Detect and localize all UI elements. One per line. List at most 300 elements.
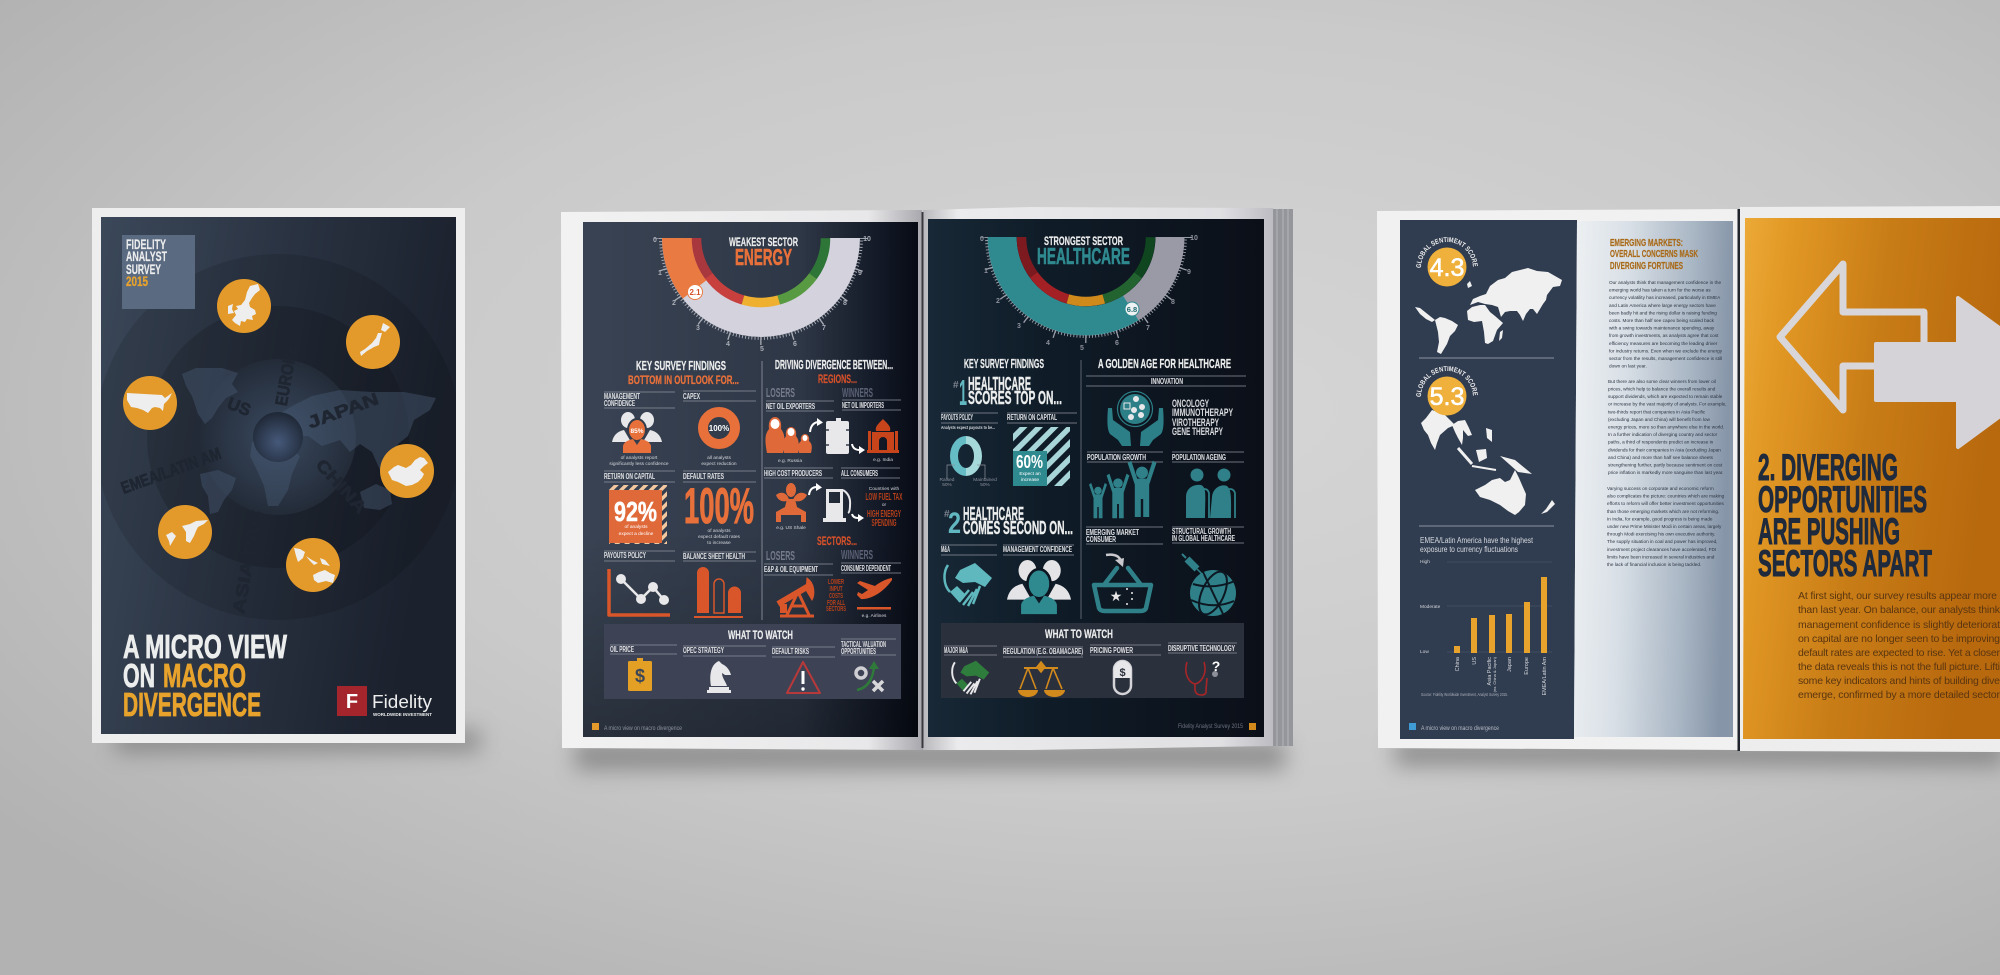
Fidelity logo: Fidelity bbox=[372, 692, 432, 712]
article body paragraph 1: costs. More than half see capex being scaled back bbox=[1609, 318, 1715, 323]
icon: tactics bbox=[856, 661, 883, 691]
bar chart: currency exposure: (ex. China & Japan) bbox=[1492, 656, 1497, 692]
heading: driving divergence: REGIONS... bbox=[818, 372, 857, 386]
heading: golden age: A GOLDEN AGE FOR HEALTHCARE bbox=[1098, 356, 1231, 371]
section heading: 2. DIVERGING bbox=[1758, 447, 1898, 488]
icon: warning triangle bbox=[787, 662, 820, 693]
panel: what to watch energy: OPPORTUNITIES bbox=[841, 647, 876, 656]
ranking 2 heading bbox=[944, 504, 1073, 540]
score badge 6.8: 6.8 bbox=[1127, 305, 1137, 314]
subheads: left findings: CAPEX bbox=[683, 392, 700, 401]
captions: russia and india: e.g. India bbox=[873, 457, 893, 463]
score badge 6.8 bbox=[1125, 302, 1139, 316]
gauge scale labels: 4 bbox=[1046, 340, 1050, 347]
icon: management confidence people: 85% bbox=[630, 428, 644, 435]
map: emea and latin america bbox=[1415, 268, 1562, 354]
arrow: to fuel pump bbox=[809, 483, 822, 495]
Fidelity logo: F bbox=[346, 691, 358, 713]
chart: payouts donut: Raised bbox=[940, 477, 955, 483]
callout: 100 percent: 100% bbox=[684, 478, 754, 534]
callout: 92 percent bbox=[609, 485, 667, 544]
text: therapies: GENE THERAPY bbox=[1172, 426, 1223, 438]
article body paragraph 3: also complicates the picture: countries which are making bbox=[1607, 494, 1725, 499]
losers and winners regions: NET OIL IMPORTERS bbox=[842, 401, 884, 410]
heading: key survey findings: KEY SURVEY FINDINGS bbox=[964, 357, 1044, 371]
losers and winners regions: ALL CONSUMERS bbox=[841, 469, 878, 478]
captions: russia and india: e.g. Russia bbox=[778, 458, 802, 464]
chart: payouts donut: Maintained bbox=[973, 477, 997, 483]
article body paragraph 2: support dividends, which are expected to remain stable bbox=[1608, 394, 1723, 399]
article body paragraph 3: through Modi exercising his own executive authority. bbox=[1607, 532, 1715, 537]
text: lower input costs: FOR ALL bbox=[827, 598, 845, 607]
caption: management confidence bbox=[609, 455, 669, 467]
callout: 100 percent: to increase bbox=[707, 540, 731, 546]
gauge scale labels bbox=[980, 235, 1198, 352]
region names on rings bbox=[119, 343, 381, 615]
ranking 2 heading: HEALTHCARE bbox=[963, 504, 1024, 524]
gauge: energy 2.1 bbox=[658, 238, 864, 341]
article body paragraph 2: prices, which help to balance the overall results and bbox=[1608, 386, 1716, 392]
icon: scales bbox=[1018, 662, 1065, 697]
icon: stethoscope bbox=[1186, 658, 1220, 695]
bar chart: currency exposure: Asia Pacific bbox=[1487, 657, 1493, 685]
section body text: emerge, confirmed by a more detailed sector bbox=[1798, 689, 2000, 701]
bar chart: currency exposure: Japan bbox=[1507, 657, 1513, 672]
article body paragraph 2: price inflation is markedly more sanguine than last year. bbox=[1608, 470, 1723, 475]
text: low fuel tax: LOW FUEL TAX bbox=[866, 492, 903, 503]
article body paragraph 3: under new Prime Minister Modi in certain areas, largely bbox=[1607, 524, 1722, 529]
icon: globe and syringe bbox=[1182, 554, 1236, 618]
ranking 1 heading: 1 bbox=[959, 372, 967, 413]
gauge scale labels: 6 bbox=[1115, 340, 1119, 347]
chart title: exposure to currency fluctuations bbox=[1420, 545, 1518, 554]
cover title: A MICRO VIEW bbox=[123, 628, 288, 665]
score badge 5.3 bbox=[1416, 366, 1478, 416]
subheads: left findings: DEFAULT RATES bbox=[683, 472, 724, 481]
gauge heading bbox=[1037, 234, 1130, 269]
text: low fuel tax bbox=[866, 486, 903, 529]
sectors losers and winners: E&P & OIL EQUIPMENT bbox=[764, 565, 818, 574]
gauge scale labels: 3 bbox=[1017, 323, 1021, 330]
divider bbox=[761, 361, 763, 620]
cover background bbox=[101, 217, 456, 734]
panel: energy page bbox=[583, 222, 918, 737]
panel: what to watch healthcare bbox=[941, 623, 1244, 698]
region names on rings: EUROPE bbox=[272, 343, 301, 407]
article body paragraph 3: The supply situation in coal and power has improved, bbox=[1607, 539, 1717, 544]
gauge scale labels: 5 bbox=[760, 346, 764, 353]
section body text: At first sight, our survey results appear more bbox=[1798, 590, 1997, 602]
survey label box: ANALYST bbox=[126, 248, 167, 264]
icon: oil barrel bbox=[826, 418, 849, 454]
subheads: healthcare findings: PAYOUTS POLICY bbox=[941, 413, 973, 422]
right paper bbox=[1740, 206, 2000, 752]
booklet: energy and healthcare spread bbox=[561, 207, 1293, 750]
page footer right: Fidelity Analyst Survey 2015 bbox=[1178, 724, 1244, 730]
article body paragraph 1: sector from the results, management confidence is still bbox=[1609, 356, 1722, 361]
article body paragraph 3: efforts to reform will offer better investment opportunities bbox=[1607, 501, 1724, 506]
text: lower input costs bbox=[826, 577, 846, 613]
icon: diverging arrows bbox=[1780, 264, 2000, 447]
article body paragraph 2: or increase by the vast majority of analysts. For example, bbox=[1608, 402, 1727, 407]
subheads: left findings: CONFIDENCE bbox=[604, 399, 635, 408]
panel: what to watch healthcare: REGULATION (E.G. OBAMACARE) bbox=[1003, 647, 1083, 656]
panel: healthcare page bbox=[928, 219, 1264, 737]
ranking 1 heading: # bbox=[953, 380, 959, 391]
article body paragraph 2: (excluding Japan and China) will benefit from low bbox=[1608, 417, 1710, 422]
icon: oil price barrel bbox=[628, 658, 652, 691]
subheads: golden age: STRUCTURAL GROWTH bbox=[1172, 527, 1231, 536]
text: low fuel tax: Countries with bbox=[869, 486, 900, 492]
panel: what to watch healthcare: PRICING POWER bbox=[1090, 646, 1133, 655]
losers and winners regions: NET OIL EXPORTERS bbox=[766, 402, 815, 411]
icon: US disc bbox=[123, 376, 177, 430]
icon: Asia Pacific disc bbox=[286, 538, 340, 592]
icon: management confidence people bbox=[612, 412, 662, 453]
chart title: EMEA/Latin America have the highest bbox=[1420, 536, 1534, 545]
gauge: healthcare 6.8 bbox=[984, 237, 1188, 339]
score badge 5.3: 5.3 bbox=[1430, 383, 1464, 411]
callout: 60 percent: increase bbox=[1021, 477, 1039, 483]
score badge 4.3: 4.3 bbox=[1430, 254, 1464, 282]
ranking 1 heading: SCORES TOP ON... bbox=[968, 388, 1062, 408]
survey label box: FIDELITY bbox=[126, 236, 166, 252]
text: lower input costs: SECTORS bbox=[826, 604, 846, 613]
subheads: healthcare findings: RETURN ON CAPITAL bbox=[1007, 413, 1057, 422]
concentric target rings with world map bbox=[101, 263, 436, 582]
score badge 5.3: GLOBAL SENTIMENT SCORE bbox=[1416, 366, 1478, 397]
text: therapies: VIROTHERAPY bbox=[1172, 417, 1219, 429]
panel: what to watch energy: OIL PRICE bbox=[610, 645, 634, 654]
subheads: golden age: EMERGING MARKET bbox=[1086, 528, 1139, 537]
text: low fuel tax: SPENDING bbox=[872, 518, 897, 529]
arrow: to barrel bbox=[810, 418, 823, 432]
subheads: healthcare findings: MANAGEMENT CONFIDENCE bbox=[1003, 545, 1072, 554]
arrow: to importer bbox=[852, 444, 865, 454]
gauge scale labels: 10 bbox=[863, 236, 871, 243]
gauge scale labels: 2 bbox=[996, 298, 1000, 305]
icon: Europe disc bbox=[217, 279, 271, 333]
region names on rings: US bbox=[225, 394, 254, 420]
article body paragraph 2: two-thirds report that companies in Asia Pacific bbox=[1608, 409, 1706, 414]
score badge 4.3: GLOBAL SENTIMENT SCORE bbox=[1416, 237, 1478, 268]
article body paragraph 3 bbox=[1607, 486, 1725, 567]
panel: maps and chart bbox=[1400, 220, 1577, 739]
gauge scale labels: 9 bbox=[858, 270, 862, 277]
subheads: golden age: POPULATION AGEING bbox=[1172, 453, 1226, 462]
heading: driving divergence bbox=[775, 357, 893, 386]
text: lower input costs: INPUT bbox=[830, 584, 843, 593]
icon: pump jack bbox=[778, 578, 814, 616]
subheads: golden age: CONSUMER bbox=[1086, 535, 1116, 544]
article body paragraph 3: limits have been increased in several industries and bbox=[1607, 554, 1715, 559]
icon: population ageing figures bbox=[1186, 468, 1235, 518]
section body text bbox=[1798, 590, 2000, 701]
article body paragraph 1: for industry returns. Even when we exclude the energy bbox=[1609, 348, 1723, 353]
bar chart: currency exposure: EMEA/Latin Am bbox=[1542, 657, 1548, 696]
article body paragraph 2: strengthening further, partly because sentiment on cost bbox=[1608, 462, 1723, 468]
cover title: ON bbox=[123, 657, 155, 694]
article body paragraph 2: dividends for their companies in Asia (excluding Japan bbox=[1608, 447, 1721, 452]
region names on rings: JAPAN bbox=[305, 389, 381, 432]
callout: 60 percent bbox=[1013, 427, 1070, 486]
article heading: EMERGING MARKETS: bbox=[1610, 238, 1683, 249]
article body paragraph 3: the lack of financial inclusion is being tackled. bbox=[1607, 562, 1701, 567]
icon: hands and petri dish bbox=[1107, 392, 1164, 446]
gauge scale labels: 2 bbox=[672, 300, 676, 307]
cover paper bbox=[92, 208, 465, 743]
page footer: A micro view on macro divergence bbox=[1421, 726, 1500, 732]
subheads: golden age bbox=[1086, 376, 1246, 544]
subheads: left findings: MANAGEMENT bbox=[604, 392, 640, 401]
article body paragraph 2: In a further indication of diverging country and sector bbox=[1608, 432, 1718, 437]
callout: 92 percent: 92% bbox=[614, 496, 657, 527]
icon: money pill bbox=[1114, 661, 1131, 694]
section body text: some key indicators and hints of building dive bbox=[1798, 675, 2000, 687]
bar chart: currency exposure: Europe bbox=[1524, 657, 1530, 675]
gauge scale labels: 1 bbox=[658, 270, 662, 277]
bar chart: currency exposure: Moderate bbox=[1420, 604, 1441, 610]
heading: driving divergence: DRIVING DIVERGENCE BETWEEN... bbox=[775, 357, 893, 372]
article body paragraph 2: paths, a third of respondents predict an increase in bbox=[1608, 440, 1714, 445]
bar chart: currency exposure: High bbox=[1420, 559, 1430, 565]
bar chart: currency exposure: China bbox=[1455, 656, 1461, 671]
panel: what to watch energy: WHAT TO WATCH bbox=[728, 628, 793, 642]
section body text: default rates are expected to rise. Yet a closer bbox=[1798, 647, 2000, 659]
chart: payouts donut: 50% bbox=[980, 482, 991, 488]
panel: what to watch healthcare: DISRUPTIVE TECHNOLOGY bbox=[1168, 644, 1235, 653]
panel: what to watch energy: TACTICAL VALUATION bbox=[841, 640, 886, 649]
icon: money pill: $ bbox=[1119, 667, 1126, 679]
subheads: healthcare findings: M&A bbox=[941, 545, 950, 554]
callout: 92 percent: of analysts bbox=[625, 524, 648, 530]
icon: handshake teal bbox=[944, 563, 992, 606]
gauge scale labels: 4 bbox=[726, 341, 730, 348]
text: therapies: ONCOLOGY bbox=[1172, 398, 1209, 410]
cover title: DIVERGENCE bbox=[123, 686, 261, 723]
icon: population growth figures bbox=[1089, 461, 1156, 518]
panel: what to watch energy bbox=[604, 624, 901, 699]
icon: EMEA and Latin America disc bbox=[158, 505, 212, 559]
icon: chess knight bbox=[707, 661, 731, 693]
gauge scale labels: 0 bbox=[653, 237, 657, 244]
article body paragraph 3: investment project clearances have accelerated, FDI bbox=[1607, 547, 1716, 552]
subheads: left findings bbox=[604, 391, 756, 561]
caption: capex bbox=[701, 455, 737, 467]
ranking 1 heading: HEALTHCARE bbox=[968, 374, 1031, 394]
icon: Japan disc bbox=[346, 315, 400, 369]
score badge 2.1: 2.1 bbox=[689, 288, 701, 297]
caption: capex: expect reduction bbox=[701, 461, 737, 467]
gauge scale labels: 5 bbox=[1080, 345, 1084, 352]
article heading bbox=[1610, 238, 1698, 272]
chart source: Source: Fidelity Worldwide Investment, Analyst Survey 2015. bbox=[1421, 692, 1508, 697]
ranking 1 heading bbox=[953, 372, 1062, 413]
losers and winners regions: WINNERS bbox=[842, 385, 873, 400]
captions: russia and india bbox=[778, 457, 893, 464]
section heading bbox=[1758, 447, 1932, 584]
icon: China disc bbox=[380, 444, 434, 498]
subheads: golden age: INNOVATION bbox=[1151, 377, 1183, 386]
callout: 92 percent: expect a decline bbox=[619, 531, 654, 537]
article body paragraph 3: In India, for example, good progress is being made bbox=[1607, 516, 1713, 521]
article body paragraph 1: down on last year. bbox=[1609, 364, 1647, 369]
shadows under booklets bbox=[115, 730, 2000, 770]
gauge scale labels: 6 bbox=[793, 341, 797, 348]
chart: payouts line bbox=[609, 569, 670, 615]
ranking 2 heading: COMES SECOND ON... bbox=[963, 518, 1073, 538]
panel: orange section opener bbox=[1743, 218, 2000, 739]
article body paragraph 3: than those emerging markets which are not reforming. bbox=[1607, 509, 1719, 514]
article body paragraph 1: currency volatility has increased, particularly in EMEA bbox=[1609, 295, 1721, 300]
left paper bbox=[1377, 209, 1738, 750]
divider bbox=[1080, 360, 1082, 619]
score badge 2.1 bbox=[688, 284, 702, 300]
booklet: cover bbox=[92, 208, 465, 743]
gutter bbox=[922, 212, 924, 748]
booklet: emerging markets spread bbox=[1377, 206, 2000, 752]
arrow: to consumers bbox=[852, 514, 864, 522]
icon: management confidence people teal bbox=[1007, 560, 1071, 614]
gauge scale labels: 7 bbox=[822, 325, 826, 332]
gauge scale labels: 3 bbox=[696, 325, 700, 332]
bar chart: currency exposure: US bbox=[1472, 657, 1478, 665]
subheads: golden age: IN GLOBAL HEALTHCARE bbox=[1172, 534, 1235, 543]
Fidelity logo: WORLDWIDE INVESTMENT bbox=[373, 712, 432, 717]
survey label box: SURVEY bbox=[126, 261, 161, 277]
panel: article text bbox=[1574, 221, 1733, 737]
article body paragraph 1: from growth investments, as analysts agree that cost bbox=[1609, 333, 1719, 338]
article body paragraph 3: Varying success on corporate and economic reform bbox=[1607, 486, 1714, 491]
caption: management confidence: of analysts report bbox=[621, 455, 658, 461]
text: low fuel tax: HIGH ENERGY bbox=[867, 509, 901, 520]
page block edge bbox=[1270, 209, 1293, 746]
chart: capex donut: 100% bbox=[709, 424, 729, 433]
bar chart: currency exposure bbox=[1420, 559, 1552, 696]
sectors losers and winners bbox=[764, 534, 901, 575]
region names on rings: CHINA bbox=[312, 455, 370, 517]
icon: taj mahal bbox=[867, 419, 899, 453]
chart title bbox=[1420, 536, 1534, 554]
panel: what to watch energy: OPEC STRATEGY bbox=[683, 646, 724, 655]
right page paper bbox=[923, 207, 1273, 750]
article body paragraph 2 bbox=[1608, 379, 1727, 475]
sectors losers and winners: CONSUMER DEPENDENT bbox=[841, 564, 891, 573]
article body paragraph 1: emerging world has taken a turn for the worse as bbox=[1609, 288, 1711, 293]
icon: fuel pump bbox=[823, 489, 850, 522]
callout: 100 percent: expect default rates bbox=[698, 534, 741, 540]
chart: balance sheet bars bbox=[694, 567, 743, 617]
ranking 2 heading: # bbox=[944, 509, 950, 520]
gauge heading: HEALTHCARE bbox=[1037, 243, 1130, 269]
article body paragraph 2: But there are also some clear winners from lower oil bbox=[1608, 379, 1716, 384]
chart: payouts donut bbox=[940, 436, 997, 488]
icon: oil gusher bbox=[776, 483, 807, 522]
article body paragraph 1: efficiency measures are becoming the leading driver bbox=[1609, 341, 1718, 346]
icon: shopping basket china bbox=[1094, 555, 1151, 611]
text: therapies bbox=[1172, 398, 1233, 438]
section body text: on capital are no longer seen to be improving bbox=[1798, 633, 2000, 645]
gutter bbox=[1738, 209, 1740, 751]
gauge heading: STRONGEST SECTOR bbox=[1044, 234, 1123, 248]
sectors losers and winners: LOSERS bbox=[766, 548, 795, 563]
caption: capex: all analysts bbox=[707, 455, 731, 461]
article body paragraph 2: energy prices, more so than anywhere else in the world. bbox=[1608, 424, 1724, 430]
chart: capex donut bbox=[703, 412, 735, 444]
score badge 4.3 bbox=[1416, 237, 1478, 286]
gauge scale labels: 0 bbox=[980, 236, 984, 243]
article body paragraph 2: and China) and more than half see balance sheets bbox=[1608, 455, 1714, 460]
page footer left: A micro view on macro divergence bbox=[604, 726, 683, 732]
region names on rings: EMEA/LATIN AM bbox=[119, 444, 224, 498]
left page paper bbox=[561, 210, 922, 750]
icon: shopping basket china: ★ bbox=[1110, 589, 1122, 605]
article heading: OVERALL CONCERNS MASK bbox=[1610, 249, 1698, 260]
subheads: left findings: PAYOUTS POLICY bbox=[604, 551, 646, 560]
gauge scale labels: 8 bbox=[843, 300, 847, 307]
text: therapies: IMMUNOTHERAPY bbox=[1172, 407, 1233, 419]
gauge scale labels bbox=[653, 236, 871, 353]
cover title: MACRO bbox=[163, 657, 246, 694]
gauge heading bbox=[729, 235, 798, 270]
subheads: healthcare findings: Analysts expect payouts to be... bbox=[941, 425, 995, 431]
losers and winners regions bbox=[764, 385, 901, 478]
icon: handshake green bbox=[952, 661, 989, 694]
sectors losers and winners: SECTORS... bbox=[817, 534, 857, 548]
survey label box bbox=[122, 235, 195, 309]
caption: airlines: e.g. Airlines bbox=[862, 613, 887, 619]
article body paragraph 1: and Latin America where large energy sectors have bbox=[1609, 303, 1716, 308]
icon: stethoscope: ? bbox=[1212, 658, 1220, 674]
caption: management confidence: significantly less confidence bbox=[609, 461, 669, 467]
text: lower input costs: COSTS bbox=[829, 591, 843, 600]
subheads: healthcare findings bbox=[941, 413, 1077, 555]
Fidelity logo bbox=[337, 686, 432, 717]
losers and winners regions: HIGH COST PRODUCERS bbox=[764, 469, 822, 478]
gauge scale labels: 7 bbox=[1146, 325, 1150, 332]
chart: payouts donut: 50% bbox=[942, 482, 953, 488]
callout: 60 percent: 60% bbox=[1016, 452, 1043, 472]
section body text: management confidence is slightly deteriorat bbox=[1798, 619, 2000, 631]
gauge scale labels: 1 bbox=[984, 268, 988, 275]
gauge scale labels: 10 bbox=[1190, 235, 1198, 242]
section body text: the data reveals this is not the full picture. Lifti bbox=[1798, 661, 2000, 673]
gauge heading: ENERGY bbox=[735, 244, 792, 270]
caption: us shale: e.g. US Shale bbox=[776, 525, 806, 531]
page footer left bbox=[592, 723, 683, 732]
survey label box: 2015 bbox=[126, 273, 148, 289]
cover title bbox=[123, 628, 288, 723]
gauge scale labels: 9 bbox=[1187, 269, 1191, 276]
heading: key survey findings bbox=[628, 358, 739, 387]
map: asia pacific bbox=[1421, 410, 1555, 515]
callout: 100 percent bbox=[684, 478, 754, 546]
icon: russian dolls bbox=[766, 417, 812, 453]
icon: airplane bbox=[857, 578, 892, 610]
article body paragraph 1: been badly hit and the rising dollar is raising funding bbox=[1609, 310, 1717, 315]
heading: key survey findings: BOTTOM IN OUTLOOK FOR... bbox=[628, 373, 739, 387]
page footer bbox=[1409, 723, 1500, 732]
subheads: left findings: BALANCE SHEET HEALTH bbox=[683, 552, 745, 561]
gauge scale labels: 8 bbox=[1171, 299, 1175, 306]
text: lower input costs: LOWER bbox=[828, 577, 844, 586]
panel: what to watch healthcare: MAJOR M&A bbox=[944, 646, 968, 655]
text: low fuel tax: or bbox=[882, 502, 887, 508]
subheads: left findings: RETURN ON CAPITAL bbox=[604, 472, 655, 481]
bar chart: currency exposure: Low bbox=[1420, 649, 1429, 655]
sectors losers and winners: WINNERS bbox=[841, 547, 873, 562]
article heading: DIVERGING FORTUNES bbox=[1610, 261, 1683, 272]
